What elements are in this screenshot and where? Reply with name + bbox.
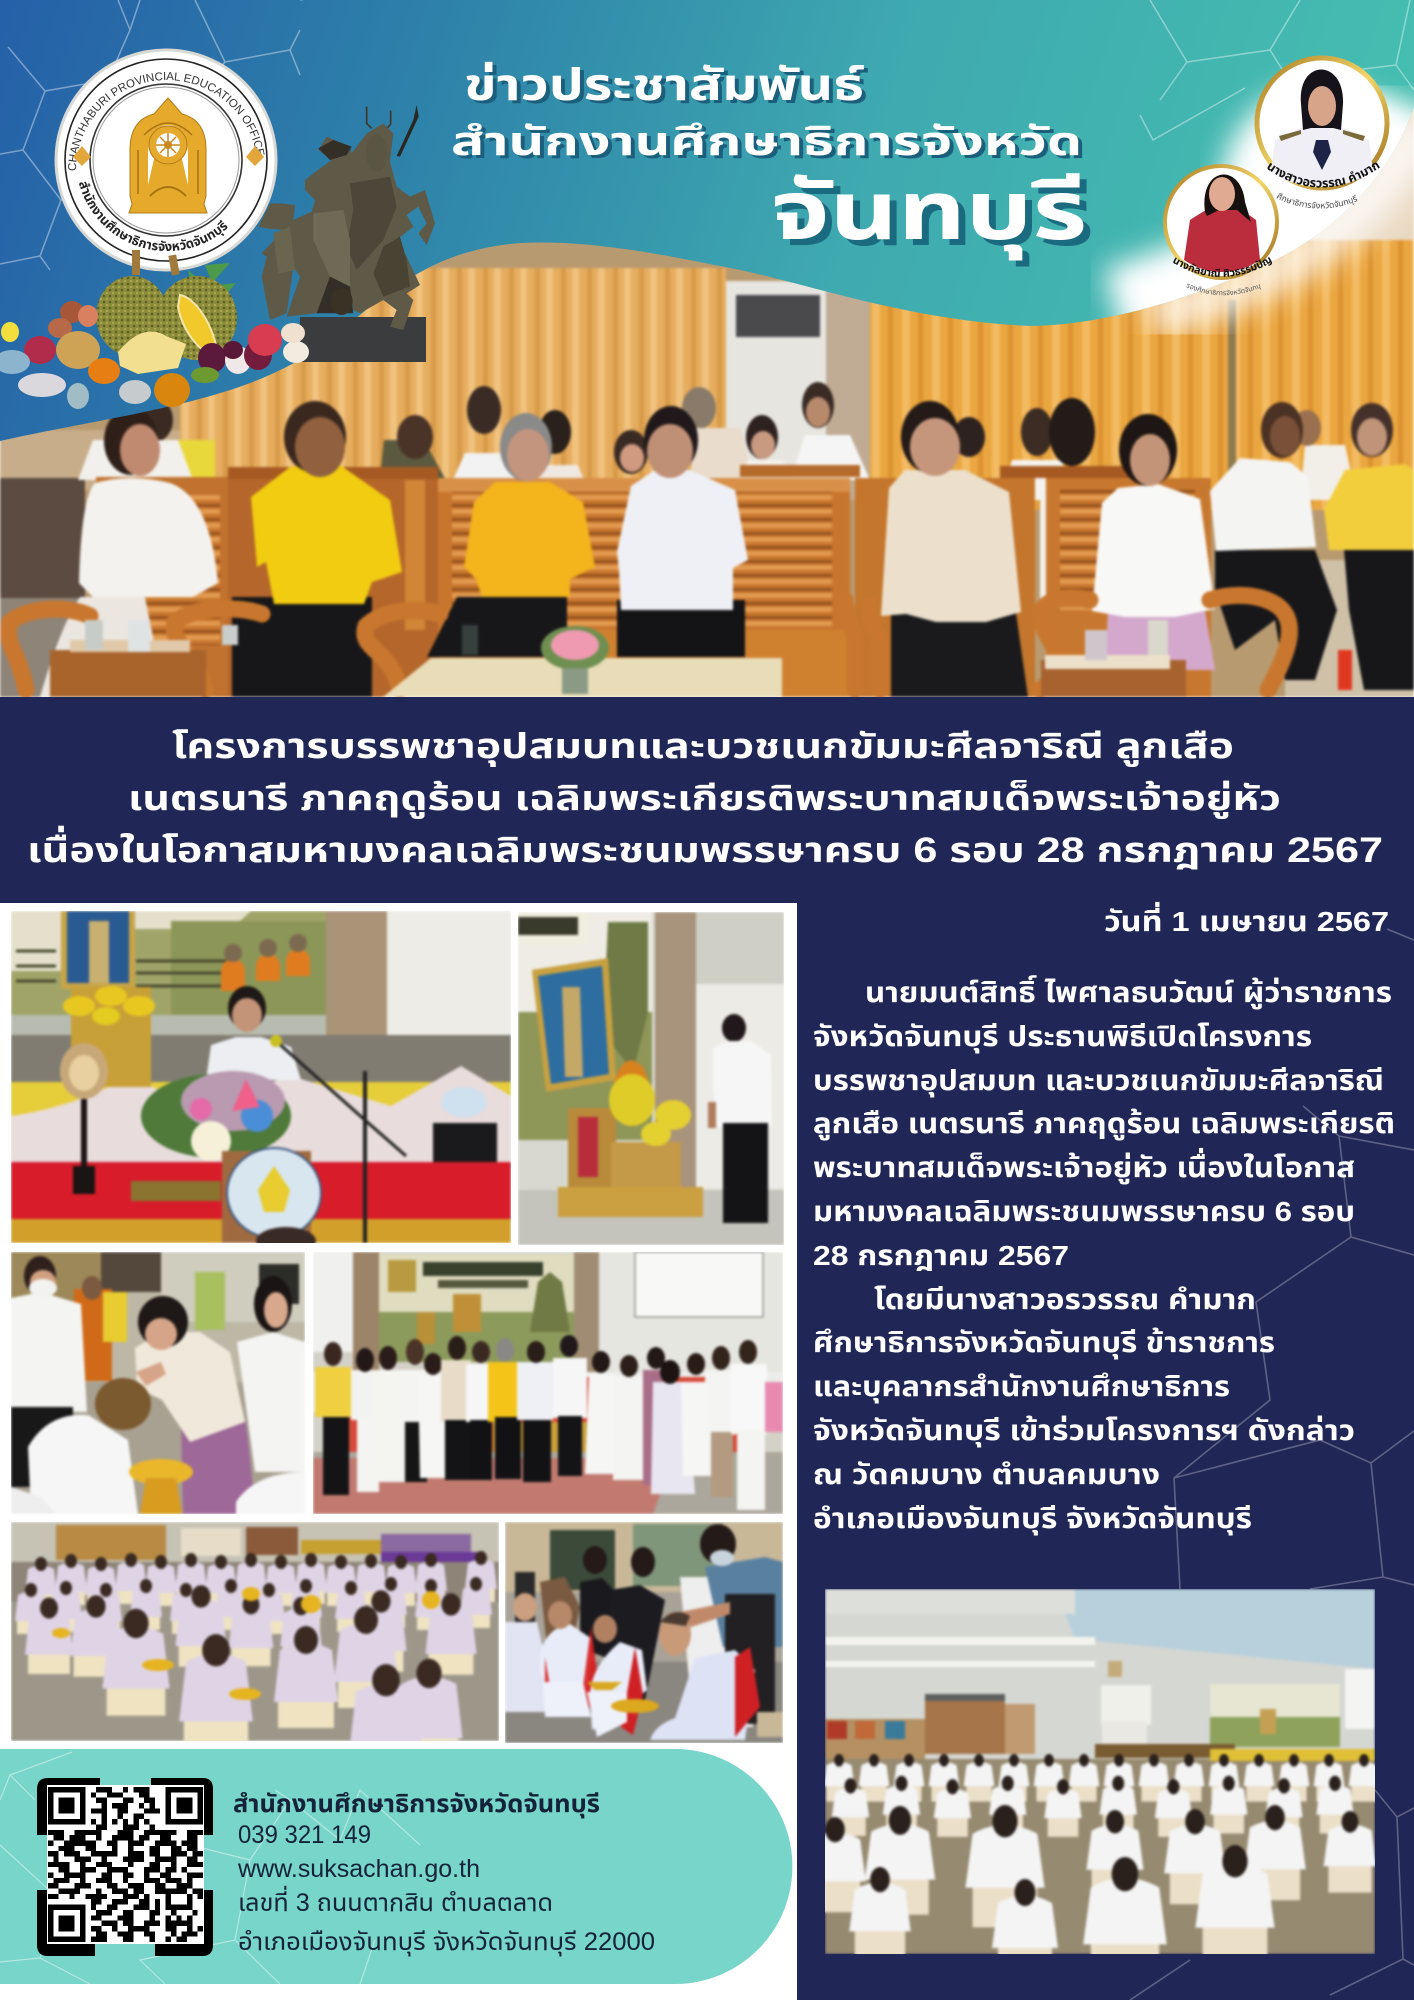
news body text: จังหวัดจันทบุรี เข้าร่วมโครงการฯ ดังกล่าว <box>813 1415 1355 1447</box>
heading: banner title: จันทบุรี <box>778 172 1094 266</box>
heading: banner title: สำนักงานศึกษาธิการจังหวัด <box>455 123 1086 167</box>
news body text: โดยมีนางสาวอรวรรณ คำมาก <box>874 1284 1256 1315</box>
contact details: อำเภอเมืองจันทบุรี จังหวัดจันทบุรี 22000 <box>238 1928 655 1957</box>
news body text: จังหวัดจันทบุรี ประธานพิธีเปิดโครงการ <box>813 1021 1312 1053</box>
news body text: ลูกเสือ เนตรนารี ภาคฤดูร้อน เฉลิมพระเกียรติ <box>813 1108 1395 1141</box>
right-side floor and chair <box>1285 560 1414 697</box>
heading: project title <box>27 727 1383 870</box>
side tables and coffee table <box>50 650 206 697</box>
portrait: provincial education officer <box>1257 58 1387 188</box>
hexagon lines on banner <box>0 0 1414 270</box>
photo: group portrait in front of ceremony banner <box>313 1252 783 1514</box>
logo: provincial education office seal: สำนักงานศึกษาธิการจังหวัดจันทบุรี <box>79 182 228 251</box>
news body text: อำเภอเมืองจันทบุรี จังหวัดจันทบุรี <box>813 1503 1252 1535</box>
heading: banner title: ข่าวประชาสัมพันธ์ <box>464 61 865 110</box>
news body text: ณ วัดคมบาง ตำบลคมบาง <box>813 1459 1160 1490</box>
photo: blessing a kneeling novice <box>11 1252 305 1514</box>
heading: banner title: จันทบุรี <box>771 166 1087 260</box>
photo: governor at the podium <box>11 911 511 1243</box>
hexagon lines on navy <box>1130 929 1414 2000</box>
caption: deputy name <box>1173 257 1272 296</box>
logo: provincial education office seal: CHANTHABURI PROVINCIAL EDUCATION OFFICE <box>68 72 265 170</box>
icon: QR code <box>37 1778 213 1956</box>
heading: project title: โครงการบรรพชาอุปสมบทและบวชเนกขัมมะศีลจาริณี ลูกเสือ <box>172 727 1234 767</box>
heading: project title: เนื่องในโอกาสมหามงคลเฉลิมพระชนมพรรษาครบ 6 รอบ 28 กรกฎาคม 2567 <box>27 825 1383 870</box>
panel: contact footer <box>0 1749 792 1984</box>
news body text: ศึกษาธิการจังหวัดจันทบุรี ข้าราชการ <box>813 1327 1275 1359</box>
news body text: นายมนต์สิทธิ์ ไพศาลธนวัฒน์ ผู้ว่าราชการ <box>865 975 1392 1010</box>
front row guests <box>40 401 1414 697</box>
photo: novices seated with golden bowls <box>11 1522 499 1741</box>
row of guests <box>315 1335 783 1510</box>
heading: banner title: สำนักงานศึกษาธิการจังหวัด <box>451 120 1082 164</box>
photo: governor paying respect to royal portrait <box>518 912 784 1245</box>
seated novices <box>505 1622 547 1712</box>
hexagon lines on footer <box>0 1752 420 1984</box>
contact details: สำนักงานศึกษาธิการจังหวัดจันทบุรี <box>233 1790 600 1819</box>
caption: officer name <box>1268 162 1380 208</box>
heading: banner title: ข่าวประชาสัมพันธ์ <box>468 64 869 113</box>
date: วันที่ 1 เมษายน 2567 <box>1104 901 1389 937</box>
chair arms <box>9 595 1289 690</box>
icon: fruits and gemstones of Chanthaburi <box>0 250 309 409</box>
heading: banner title <box>451 61 1094 266</box>
white glow under banner edge <box>1150 120 1414 315</box>
news body text: และบุคลากรสำนักงานศึกษาธิการ <box>813 1371 1230 1403</box>
contact details: เลขที่ 3 ถนนตากสิน ตำบลตลาด <box>238 1885 553 1917</box>
news body text: บรรพชาอุปสมบท และบวชเนกขัมมะศีลจาริณี <box>813 1065 1384 1097</box>
caption: officer name: ศึกษาธิการจังหวัดจันทบุรี <box>1276 193 1358 208</box>
icon: dharma wheel emblem <box>129 98 207 213</box>
portrait: deputy education officer <box>1165 166 1277 278</box>
contact details: 039 321 149 <box>238 1821 371 1849</box>
panel: project title band <box>0 697 1414 903</box>
news body text: มหามงคลเฉลิมพระชนมพรรษาครบ 6 รอบ <box>813 1196 1355 1227</box>
caption: deputy name: รองศึกษาธิการจังหวัดจันทบุรี <box>1186 284 1262 296</box>
top photo: seated officials on wooden chairs <box>0 108 1414 697</box>
contact details: www.suksachan.go.th <box>237 1855 480 1883</box>
header banner with gradient wave <box>0 0 1414 441</box>
heading: project title: เนตรนารี ภาคฤดูร้อน เฉลิมพระเกียรติพระบาทสมเด็จพระเจ้าอยู่หัว <box>128 779 1281 819</box>
photo: hall full of novices <box>825 1589 1375 1954</box>
audience rows <box>804 1754 1379 1986</box>
news body text: 28 กรกฎาคม 2567 <box>813 1240 1069 1271</box>
news body text <box>813 975 1395 1535</box>
logo: provincial education office seal <box>54 48 278 272</box>
wooden chairs <box>96 465 1211 697</box>
back row of attendees <box>78 382 1357 640</box>
contact details <box>233 1790 655 1957</box>
news body text: พระบาทสมเด็จพระเจ้าอยู่หัว เนื่องในโอกาส <box>813 1147 1355 1185</box>
caption: officer name: นางสาวอรวรรณ คำมาก <box>1268 162 1380 188</box>
panel: right news column <box>797 901 1414 2000</box>
icon: King Taksin statue <box>258 105 435 362</box>
photo: head shaving of novices <box>505 1522 783 1743</box>
